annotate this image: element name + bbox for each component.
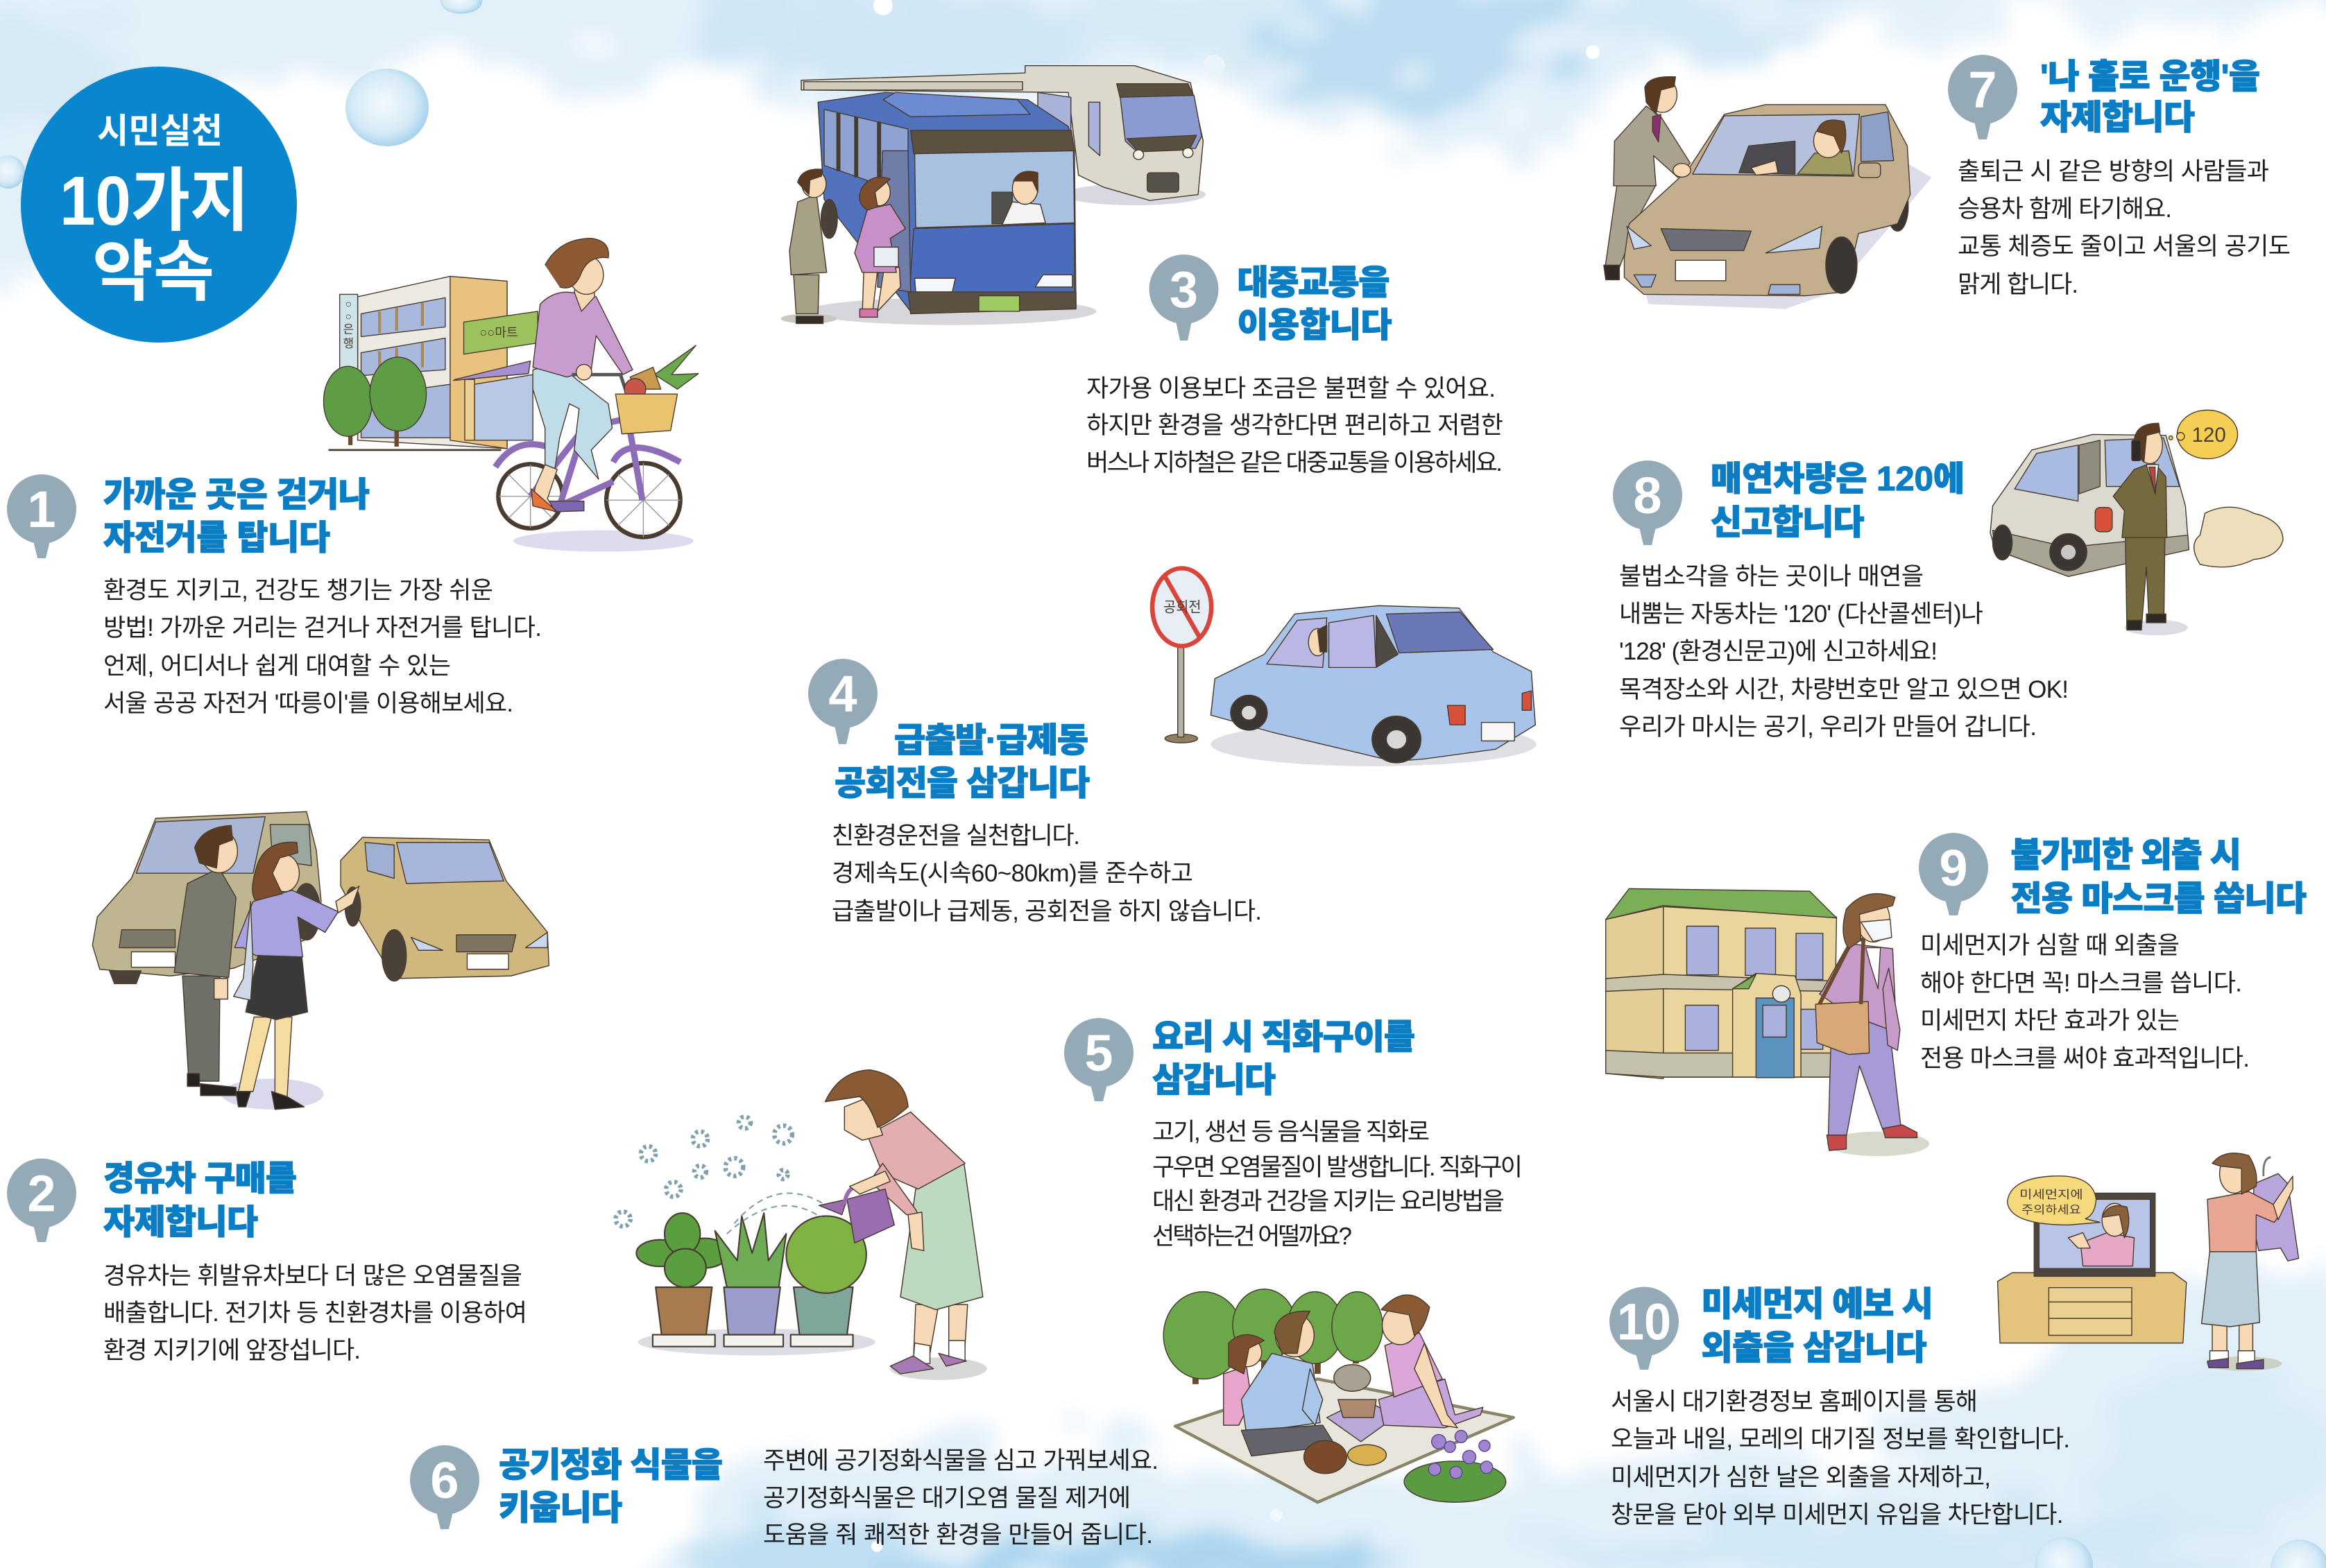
marker 3 xyxy=(1149,255,1218,341)
heading 10: 외출을 삼갑니다 xyxy=(1701,1329,1927,1367)
illustration: woman cycling past a building: ○○마트 xyxy=(479,325,518,339)
text 1: 방법! 가까운 거리는 걷거나 자전거를 탑니다. xyxy=(103,614,542,641)
heading 1: 자전거를 탑니다 xyxy=(103,519,330,557)
title badge: 약속 xyxy=(92,235,214,309)
marker 2: 2 xyxy=(27,1165,56,1222)
heading 2 xyxy=(103,1160,297,1241)
text 1: 환경도 지키고, 건강도 챙기는 가장 쉬운 xyxy=(103,577,493,604)
illustration: building and woman wearing mask xyxy=(1606,888,1929,1156)
marker 8 xyxy=(1613,460,1682,545)
marker 1: 1 xyxy=(27,481,56,538)
title badge: 시민실천 xyxy=(97,112,223,150)
heading 7 xyxy=(2040,58,2260,137)
heading 2: 경유차 구매를 xyxy=(103,1160,297,1198)
text 2: 경유차는 휘발유차보다 더 많은 오염물질을 xyxy=(103,1262,522,1290)
panel: step 1 xyxy=(7,474,542,717)
illustration: woman cycling past a building: 은 xyxy=(343,323,354,336)
panel: step 8 xyxy=(1613,460,2069,741)
heading 10: 미세먼지 예보 시 xyxy=(1701,1286,1933,1323)
text 6: 도움을 줘 쾌적한 환경을 만들어 줍니다. xyxy=(763,1522,1153,1549)
heading 4: 공회전을 삼갑니다 xyxy=(835,765,1090,802)
text 7 xyxy=(1958,158,2291,298)
illustration: woman cycling past a building xyxy=(323,239,699,552)
heading 4 xyxy=(835,722,1090,802)
heading 8 xyxy=(1711,460,1965,542)
heading 9: 불가피한 외출 시 xyxy=(2010,837,2241,875)
panel: step 2 xyxy=(7,1158,527,1364)
text 8: '128' (환경신문고)에 신고하세요! xyxy=(1619,638,1938,665)
text 2: 배출합니다. 전기차 등 친환경차를 이용하여 xyxy=(103,1300,527,1327)
text 8 xyxy=(1619,563,2069,741)
text 10: 미세먼지가 심한 날은 외출을 자제하고, xyxy=(1611,1464,1991,1491)
text 5: 고기, 생선 등 음식물을 직화로 xyxy=(1152,1119,1430,1146)
heading 5: 삼갑니다 xyxy=(1152,1062,1276,1099)
text 9: 미세먼지가 심할 때 외출을 xyxy=(1920,932,2180,959)
text 2: 환경 지키기에 앞장섭니다. xyxy=(103,1337,361,1364)
text 3: 하지만 환경을 생각한다면 편리하고 저렴한 xyxy=(1086,412,1503,439)
text 8: 불법소각을 하는 곳이나 매연을 xyxy=(1619,563,1924,590)
text 2 xyxy=(103,1262,527,1364)
heading 9: 전용 마스크를 씁니다 xyxy=(2010,881,2307,918)
marker 4 xyxy=(808,659,878,744)
text 6: 공기정화식물은 대기오염 물질 제거에 xyxy=(763,1485,1131,1512)
illustration: idling sign and blue car xyxy=(1152,568,1537,766)
marker 8: 8 xyxy=(1633,467,1662,524)
text 7: 교통 체증도 줄이고 서울의 공기도 xyxy=(1958,233,2291,260)
heading 6: 키웁니다 xyxy=(499,1490,622,1527)
marker 7: 7 xyxy=(1968,61,1997,119)
text 3 xyxy=(1086,375,1503,476)
heading 1: 가까운 곳은 걷거나 xyxy=(103,476,370,514)
text 1: 언제, 어디서나 쉽게 대여할 수 있는 xyxy=(103,653,451,680)
text 1: 서울 공공 자전거 '따릉이'를 이용해보세요. xyxy=(103,690,513,717)
text 4 xyxy=(832,822,1262,925)
marker 1 xyxy=(7,474,76,558)
illustration: van, man phoning 120, exhaust cloud: 120 xyxy=(2191,424,2226,447)
illustration: TV air quality forecast and woman: 주의하세요 xyxy=(2021,1204,2081,1216)
text 3: 버스나 지하철은 같은 대중교통을 이용하세요. xyxy=(1086,449,1503,476)
heading 1 xyxy=(103,476,370,557)
title badge: 10가지 xyxy=(60,162,249,240)
panel: step 9 xyxy=(1919,833,2307,1072)
text 5: 선택하는건 어떨까요? xyxy=(1152,1223,1352,1250)
text 10: 서울시 대기환경정보 홈페이지를 통해 xyxy=(1611,1388,1978,1415)
text 8: 우리가 마시는 공기, 우리가 만들어 갑니다. xyxy=(1619,714,2037,741)
heading 9 xyxy=(2010,837,2307,918)
illustration: van, man phoning 120, exhaust cloud xyxy=(1990,410,2283,635)
marker 6 xyxy=(410,1445,479,1529)
illustration: family picnic xyxy=(1163,1289,1514,1502)
marker 7 xyxy=(1948,55,2017,139)
text 8: 내뿜는 자동차는 '120' (다산콜센터)나 xyxy=(1619,601,1983,628)
heading 4: 급출발·급제동 xyxy=(894,722,1088,759)
illustration: bus and subway train xyxy=(781,66,1206,325)
text 6 xyxy=(763,1447,1158,1549)
text 4: 급출발이나 급제동, 공회전을 하지 않습니다. xyxy=(832,898,1262,925)
illustration: TV air quality forecast and woman: 미세먼지에 xyxy=(2019,1189,2083,1201)
marker 10 xyxy=(1609,1287,1679,1370)
marker 9 xyxy=(1919,833,1988,915)
text 9: 전용 마스크를 써야 효과적입니다. xyxy=(1920,1045,2250,1072)
heading 5 xyxy=(1152,1019,1415,1099)
marker 5 xyxy=(1064,1018,1134,1101)
illustration: woman watering plants xyxy=(615,1070,987,1380)
text 4: 경제속도(시속60~80km)를 준수하고 xyxy=(832,860,1193,887)
text 9 xyxy=(1920,932,2250,1072)
text 8: 목격장소와 시간, 차량번호만 알고 있으면 OK! xyxy=(1619,676,2069,703)
panel: step 7 xyxy=(1948,55,2291,298)
heading 10 xyxy=(1701,1286,1933,1367)
text 10 xyxy=(1611,1388,2070,1528)
potted plants xyxy=(636,1213,875,1355)
illustration: woman cycling past a building: ○ xyxy=(345,298,352,310)
text 4: 친환경운전을 실천합니다. xyxy=(832,822,1080,850)
heading 7: '나 홀로 운행'을 xyxy=(2040,58,2260,96)
text 5: 대신 환경과 건강을 지키는 요리방법을 xyxy=(1152,1188,1505,1215)
illustration: carpooling men and beige car xyxy=(1604,77,1932,309)
illustration: woman cycling past a building: 행 xyxy=(343,337,354,350)
illustration: idling sign and blue car: 공회전 xyxy=(1163,599,1201,615)
marker 9: 9 xyxy=(1939,839,1968,897)
panel: step 10 xyxy=(1609,1286,2070,1528)
marker 2 xyxy=(7,1158,76,1242)
marker 10: 10 xyxy=(1617,1293,1671,1351)
text 10: 창문을 닫아 외부 미세먼지 유입을 차단합니다. xyxy=(1611,1501,2063,1528)
heading 2: 자제합니다 xyxy=(103,1204,258,1241)
heading 7: 자제합니다 xyxy=(2040,99,2195,137)
text 7: 맑게 합니다. xyxy=(1958,271,2078,298)
marker 5: 5 xyxy=(1084,1024,1113,1082)
text 9: 해야 한다면 꼭! 마스크를 씁니다. xyxy=(1920,970,2242,997)
text 7: 출퇴근 시 같은 방향의 사람들과 xyxy=(1958,158,2269,185)
marker 4: 4 xyxy=(828,665,857,723)
airborne dust specks xyxy=(615,1117,831,1234)
gardener xyxy=(819,1070,987,1380)
marker 3: 3 xyxy=(1170,261,1198,318)
text 5 xyxy=(1152,1119,1523,1250)
text 10: 오늘과 내일, 모레의 대기질 정보를 확인합니다. xyxy=(1611,1426,2070,1453)
title badge xyxy=(21,67,297,343)
heading 3 xyxy=(1238,264,1392,344)
text 9: 미세먼지 차단 효과가 있는 xyxy=(1920,1007,2180,1035)
heading 5: 요리 시 직화구이를 xyxy=(1152,1019,1415,1056)
heading 8: 매연차량은 120에 xyxy=(1711,460,1965,498)
illustration: TV air quality forecast and woman xyxy=(1998,1153,2299,1371)
heading 6 xyxy=(499,1447,723,1527)
marker 6: 6 xyxy=(430,1451,459,1509)
heading 6: 공기정화 식물을 xyxy=(499,1447,723,1484)
text 5: 구우면 오염물질이 발생합니다. 직화구이 xyxy=(1152,1154,1523,1181)
text 7: 승용차 함께 타기해요. xyxy=(1958,196,2172,223)
panel: step 5 xyxy=(1064,1018,1523,1250)
text 1 xyxy=(103,577,542,717)
panel: step 6 xyxy=(410,1445,1158,1549)
illustration: woman cycling past a building: ○ xyxy=(345,311,352,323)
panel: step 4 xyxy=(808,659,1262,925)
panel: step 3 xyxy=(1086,255,1503,476)
heading 3: 이용합니다 xyxy=(1238,307,1392,344)
heading 3: 대중교통을 xyxy=(1238,264,1390,302)
heading 8: 신고합니다 xyxy=(1711,504,1865,542)
text 6: 주변에 공기정화식물을 심고 가꿔보세요. xyxy=(763,1447,1158,1474)
text 3: 자가용 이용보다 조금은 불편할 수 있어요. xyxy=(1086,375,1496,402)
illustration: couple choosing cars xyxy=(92,811,549,1110)
